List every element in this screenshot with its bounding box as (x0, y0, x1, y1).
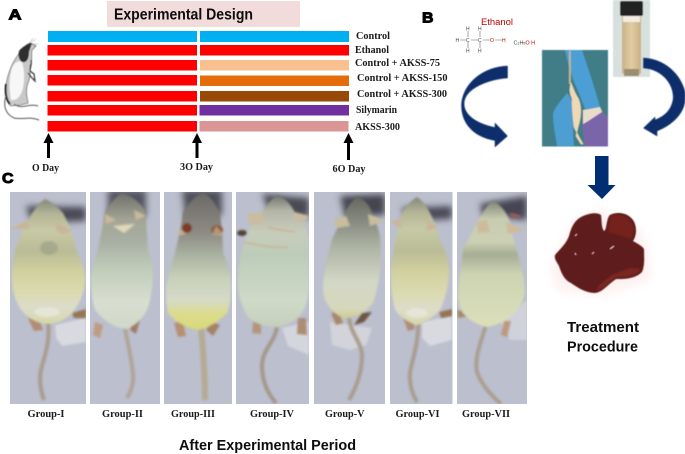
row: control + AKSS-150 (48, 75, 349, 86)
photo: Group-I mouse (10, 192, 86, 404)
caption: after experimental period: After Experimental Period (179, 437, 356, 454)
ethanol structural formula: C (466, 38, 470, 44)
curved arrow: left (461, 66, 508, 147)
row: silymarin (48, 105, 349, 116)
row: ethanol (48, 45, 349, 56)
label: 30 day: 3O Day (180, 162, 214, 173)
icon: rat sketch (5, 38, 39, 120)
panel label A: A (8, 6, 22, 24)
photo: Group-VII mouse (457, 192, 527, 404)
arrow: day 60 (344, 133, 354, 160)
group labels for bars: Ethanol (355, 45, 389, 56)
group labels for bars: Control + AKSS-75 (355, 58, 440, 69)
ethanol structural formula: O (490, 38, 494, 44)
group labels: Group-II (102, 409, 143, 420)
caption: treatment procedure: Procedure (567, 340, 638, 356)
caption: treatment procedure (567, 320, 639, 356)
photo: Group-VI mouse (390, 192, 452, 404)
arrow: day 30 (192, 133, 202, 158)
row: control (48, 31, 349, 42)
group labels for bars: Control (356, 31, 390, 42)
group labels: Group-V (325, 409, 365, 420)
photo: Group-V mouse (314, 192, 385, 404)
group labels for bars: AKSS-300 (355, 122, 400, 133)
label: 0 day: O Day (32, 163, 60, 174)
glove: upper (565, 50, 600, 109)
ethanol structural formula: H (466, 48, 470, 54)
wrist (583, 107, 603, 124)
group labels: Group-VI (396, 409, 440, 420)
photo: liver (551, 210, 650, 296)
group labels for bars (355, 31, 448, 133)
photo: oral gavage of rat (542, 50, 608, 146)
ethanol structural formula: Ethanol (481, 17, 513, 27)
photo: Group-II mouse (90, 190, 160, 404)
group labels: Group-III (171, 409, 215, 420)
ethanol structural formula: C (478, 38, 482, 44)
row: AKSS-300 (48, 121, 348, 132)
arrow: down to liver (588, 156, 616, 199)
title: Experimental Design (107, 1, 300, 27)
held rat (570, 83, 583, 144)
group labels for bars: Silymarin (356, 105, 397, 116)
group labels for bars: Control + AKSS-150 (357, 73, 448, 84)
ethanol structural formula: H (478, 48, 482, 54)
label: 60 day: 6O Day (332, 164, 366, 175)
ethanol structural formula: H (502, 38, 506, 44)
glove: purple (582, 112, 608, 146)
group labels for bars: Control + AKSS-300 (357, 89, 447, 100)
photo: Group-III mouse (164, 190, 232, 404)
gavage tube (569, 51, 571, 84)
group labels: Group-IV (250, 409, 294, 420)
photo: extract vial (613, 0, 650, 77)
ethanol structural formula: H (478, 26, 482, 32)
curved arrow: right (644, 58, 685, 136)
glove: lower (553, 93, 574, 146)
group labels: Group-VII (462, 409, 510, 420)
ethanol structural formula (456, 17, 535, 54)
title: Experimental Design: Experimental Design (114, 6, 253, 24)
row: control + AKSS-300 (48, 91, 349, 102)
bar chart: treatment timeline (48, 31, 349, 132)
photo: Group-IV mouse (236, 192, 309, 404)
arrow: day 0 (44, 133, 54, 158)
ethanol structural formula: H (466, 26, 470, 32)
group labels: Group-I (28, 409, 64, 420)
panel label B: B (422, 10, 434, 26)
group labels (28, 409, 510, 420)
panel label C: C (2, 170, 14, 187)
row: control + AKSS-75 (48, 60, 349, 70)
ethanol structural formula: H (456, 38, 460, 44)
ethanol structural formula: C2H5O H (514, 40, 535, 46)
caption: treatment procedure: Treatment (567, 320, 639, 336)
